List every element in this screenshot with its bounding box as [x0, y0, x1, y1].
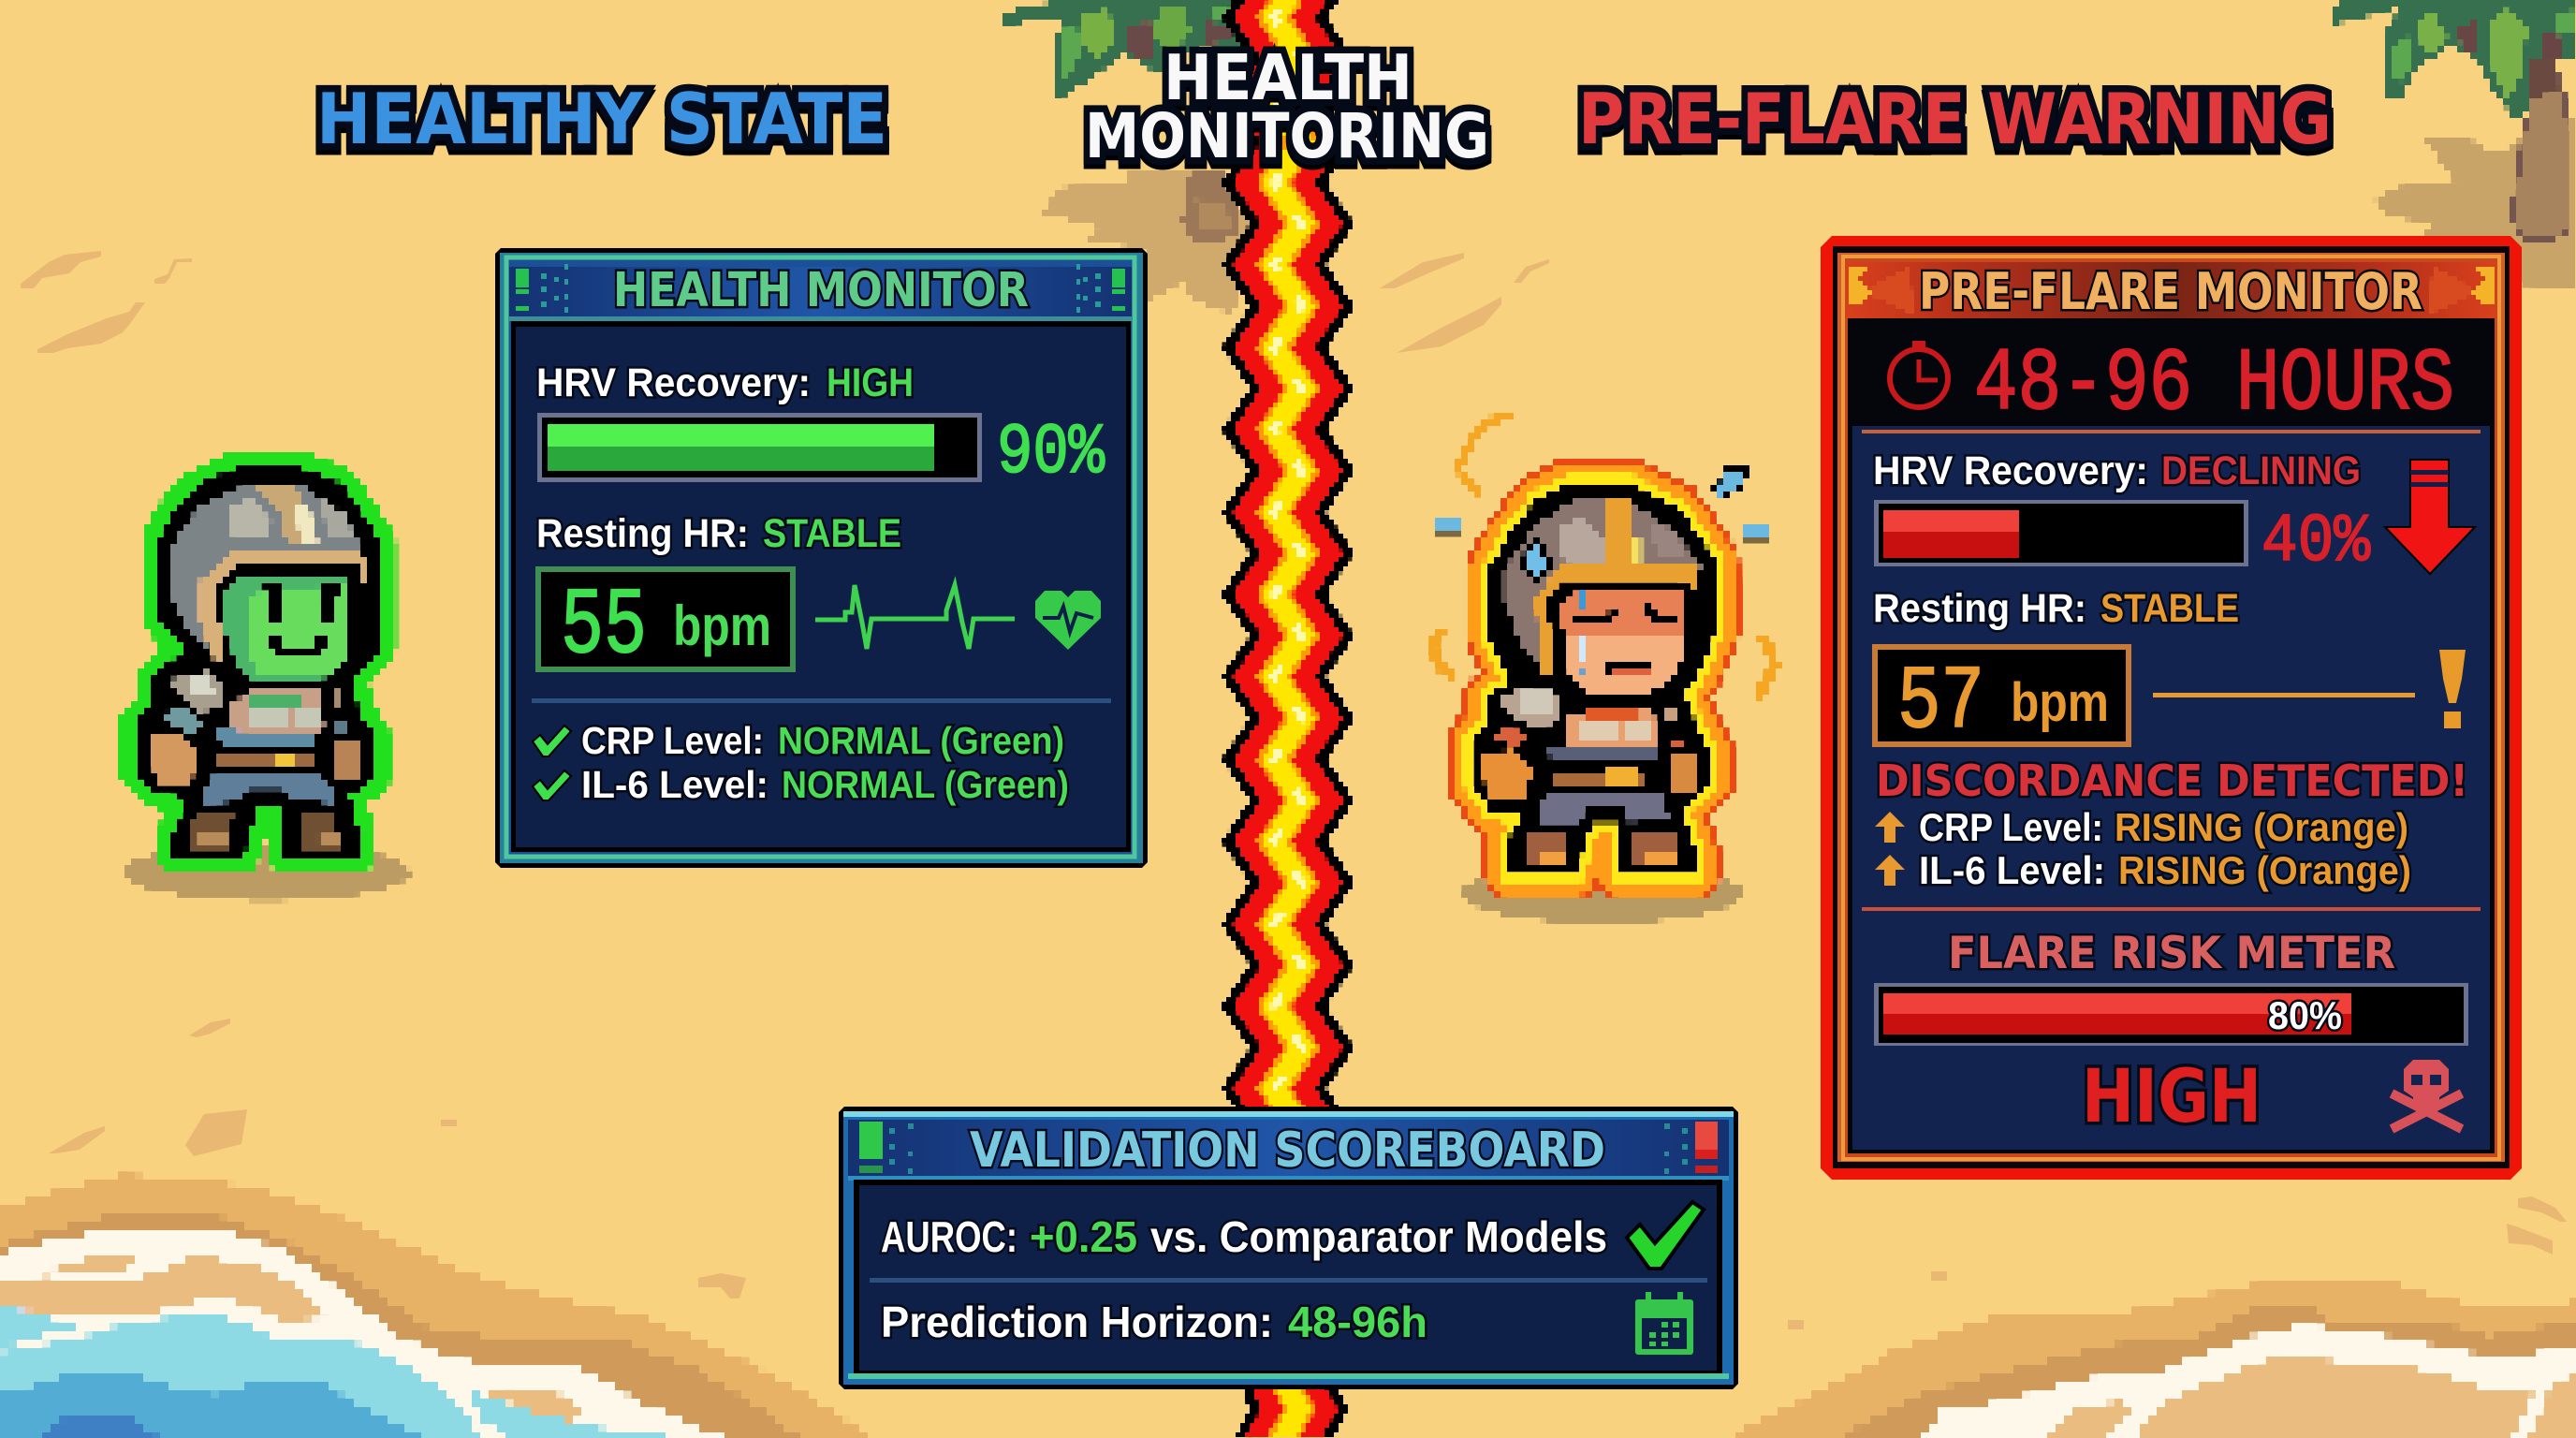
resting HR label: STABLE — [2100, 586, 2239, 631]
flare risk heading: FLARE RISK METER — [1948, 928, 2395, 979]
HRV recovery label: HRV Recovery: — [1873, 448, 2148, 493]
icon: down arrow — [2385, 460, 2475, 574]
IL-6 level row — [533, 763, 1069, 806]
panel: validation scoreboard — [839, 1107, 1738, 1389]
AUROC row: AUROC: — [881, 1212, 1017, 1261]
character: sweating explorer with fire aura — [1432, 415, 1776, 923]
palm tree left with shadow — [1003, 0, 1254, 315]
bpm readout — [1875, 647, 2129, 754]
icon: calendar — [1635, 1292, 1693, 1355]
risk level: HIGH — [2082, 1055, 2261, 1139]
IL-6 level row — [1875, 848, 2411, 892]
title: health monitoring: HEALTH — [1164, 41, 1412, 114]
HRV recovery label — [1873, 448, 2361, 493]
icon: skull — [2392, 1060, 2462, 1129]
resting HR label: STABLE — [763, 511, 901, 556]
HRV recovery label: DECLINING — [2161, 448, 2361, 493]
CRP level row: NORMAL (Green) — [778, 719, 1064, 762]
icon: check mark — [1627, 1202, 1704, 1269]
heading: pre-flare monitor: PRE-FLARE MONITOR — [1919, 262, 2422, 321]
icon: exclamation — [2439, 650, 2466, 728]
HRV recovery label: HRV Recovery: — [536, 360, 811, 405]
CRP level row: CRP Level: — [581, 719, 764, 762]
title: health monitoring: MONITORING — [1085, 100, 1489, 172]
AUROC row: +0.25 — [1030, 1212, 1137, 1261]
icon: heart — [1035, 591, 1101, 650]
IL-6 level row: IL-6 Level: — [581, 763, 768, 806]
resting HR label — [1873, 586, 2239, 631]
IL-6 level row: NORMAL (Green) — [782, 763, 1069, 806]
HRV progress bar — [537, 413, 982, 482]
HRV percent value: 40% — [2261, 504, 2371, 580]
AUROC row: vs. Comparator Models — [1150, 1212, 1607, 1261]
ECG line — [815, 585, 1015, 649]
header bar — [848, 1120, 1729, 1178]
heading: health monitor: HEALTH MONITOR — [613, 263, 1029, 318]
resting HR label: Resting HR: — [536, 511, 749, 556]
title: health monitoring — [1085, 41, 1489, 172]
resting HR label — [536, 511, 901, 556]
HRV recovery label: HIGH — [827, 360, 914, 405]
fire lightning divider — [1271, 0, 1302, 1438]
bpm readout — [538, 569, 793, 681]
prediction horizon row: Prediction Horizon: — [881, 1298, 1273, 1346]
CRP level row — [533, 719, 1064, 762]
CRP level row — [1875, 805, 2408, 849]
character: healthy green explorer — [124, 466, 410, 901]
beach shoreline left — [0, 1175, 866, 1438]
bpm readout: 57 — [1897, 652, 1984, 754]
flare risk bar: 80% — [2268, 993, 2342, 1037]
panel: pre-flare monitor — [1821, 236, 2522, 1180]
header bar — [509, 267, 1132, 318]
bpm readout: bpm — [673, 594, 771, 657]
header pixel decoration — [516, 264, 1125, 313]
title: healthy state: HEALTHY STATE — [316, 78, 887, 160]
discordance alert: DISCORDANCE DETECTED! — [1876, 756, 2468, 806]
IL-6 level row: IL-6 Level: — [1919, 848, 2105, 892]
header bar — [1846, 262, 2496, 318]
flare risk bar — [1874, 983, 2468, 1046]
countdown readout: 48-96 HOURS — [1974, 334, 2454, 435]
title: pre-flare warning: PRE-FLARE WARNING — [1578, 78, 2332, 160]
CRP level row: RISING (Orange) — [2115, 805, 2408, 849]
AUROC row — [881, 1212, 1607, 1261]
HRV progress bar — [1874, 500, 2248, 566]
sand ripple marks — [21, 251, 2567, 1329]
IL-6 level row: RISING (Orange) — [2118, 848, 2411, 892]
palm tree right with shadow — [2335, 0, 2576, 287]
CRP level row: CRP Level: — [1919, 805, 2103, 849]
heading: validation scoreboard: VALIDATION SCOREBOARD — [970, 1123, 1605, 1179]
resting HR label: Resting HR: — [1873, 586, 2086, 631]
bpm readout: bpm — [2011, 672, 2109, 733]
HRV percent value: 90% — [997, 413, 1105, 493]
prediction horizon row: 48-96h — [1288, 1298, 1427, 1346]
beach shoreline right — [1732, 1283, 2576, 1438]
bpm readout: 55 — [561, 575, 647, 681]
panel: health monitor — [495, 248, 1148, 868]
